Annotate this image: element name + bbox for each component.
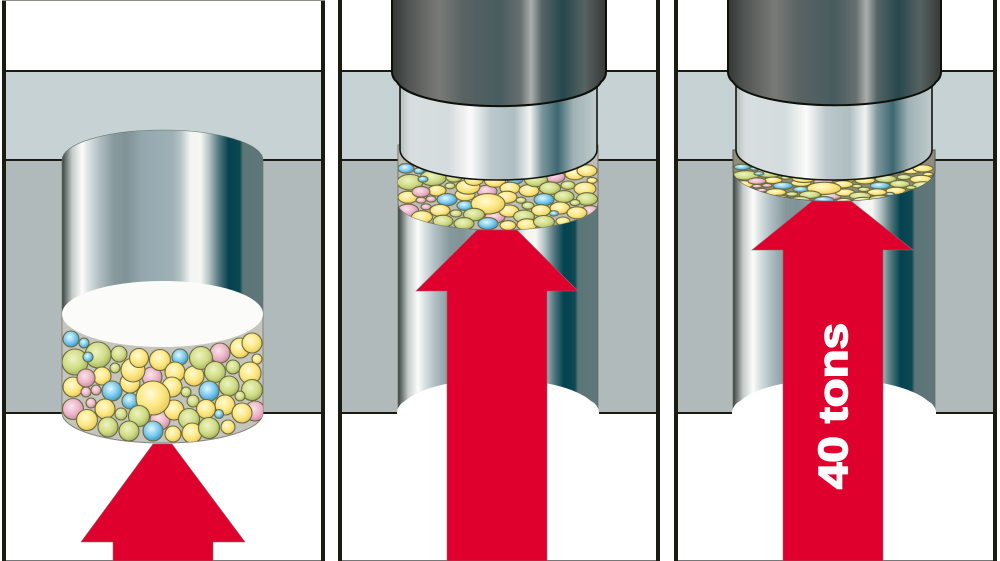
- white opening below die: [732, 379, 936, 414]
- arrow: medium force: [416, 230, 578, 561]
- upper punch: [392, 0, 606, 106]
- upper die silver section: [736, 85, 932, 180]
- powder column: [62, 314, 265, 443]
- die bore cylinder: [398, 145, 598, 413]
- top surface of powder: [62, 281, 263, 347]
- panel 3: powder fully compressed to tablet: [674, 0, 997, 561]
- panel 2: powder partially compressed: [338, 0, 660, 561]
- upper punch: [728, 0, 941, 105]
- tablet: [733, 150, 936, 204]
- compressed powder: [397, 145, 600, 231]
- upper die silver section: [400, 85, 597, 180]
- arrow: small force: [81, 444, 245, 561]
- arrow: full force: [752, 201, 913, 561]
- label: 40 tons: 40 tons: [810, 323, 856, 489]
- panel 1: punch lowered, powder filled: [2, 0, 325, 561]
- die bore cylinder: [733, 150, 935, 413]
- lower punch cylinder: [62, 130, 263, 320]
- white opening below die: [397, 379, 599, 414]
